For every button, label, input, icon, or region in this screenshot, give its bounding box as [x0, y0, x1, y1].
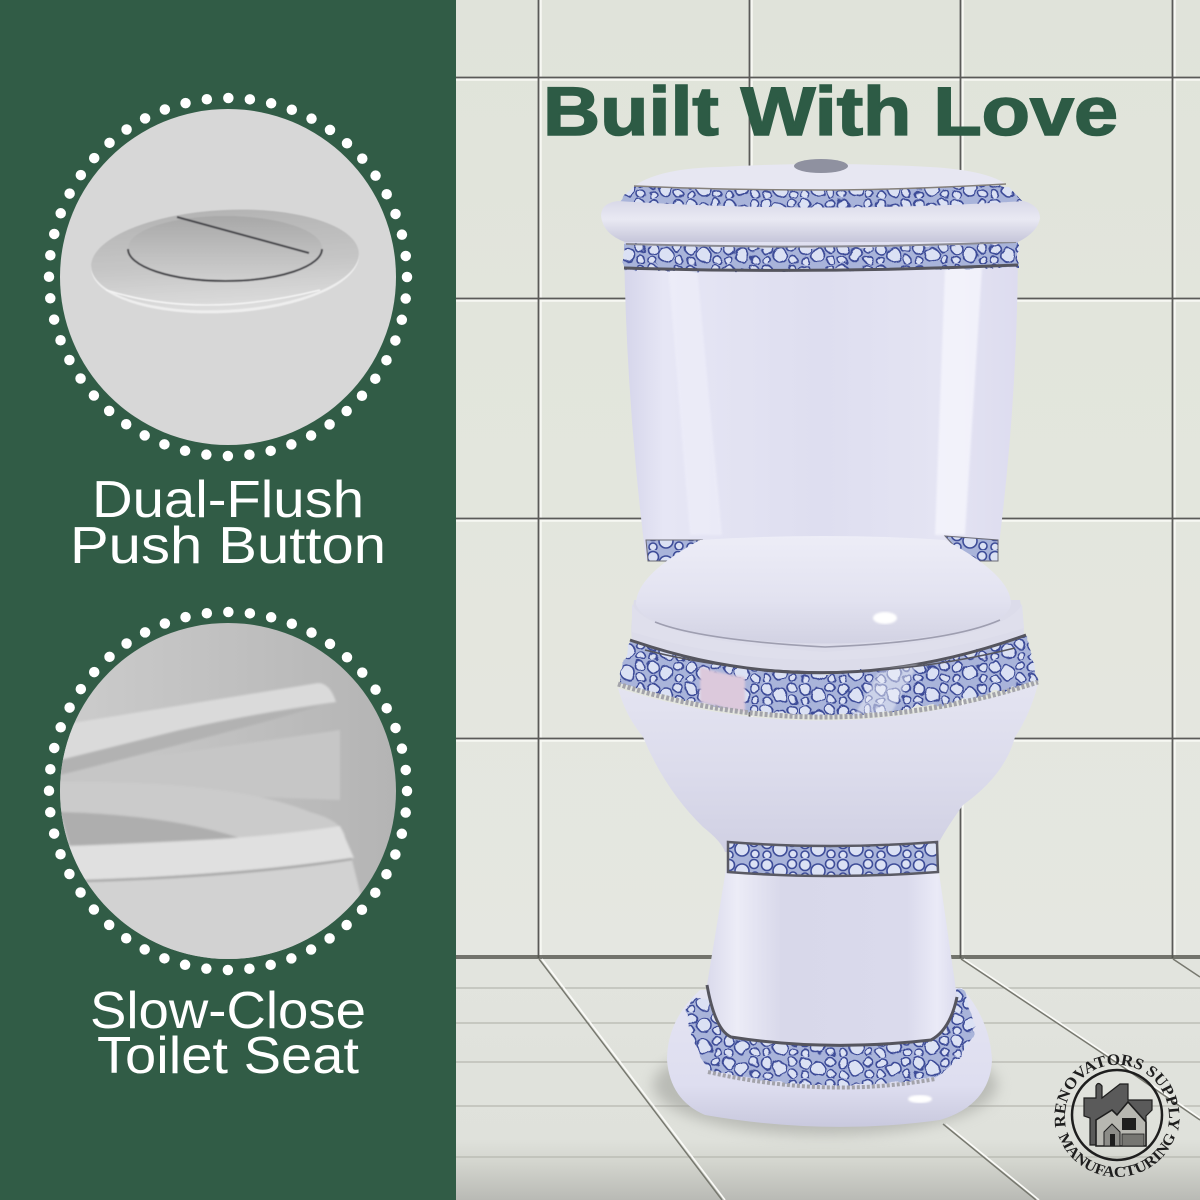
logo: Renovators Supply Manufacturing — [1054, 1054, 1180, 1178]
feature: slow-close toilet seat — [49, 612, 407, 1085]
base — [667, 988, 992, 1127]
bowl — [618, 684, 1038, 852]
dotted ring — [49, 98, 407, 456]
seat underside rim — [631, 600, 1024, 672]
feature: dual-flush push button — [49, 98, 407, 575]
rim decorative band — [618, 635, 1038, 717]
label: dual-flush push button: Dual-Flush — [92, 471, 364, 529]
flush button — [794, 159, 848, 173]
house icon — [1084, 1084, 1152, 1146]
label: slow-close toilet seat: Slow-Close — [90, 982, 366, 1040]
base band — [686, 990, 976, 1086]
toilet illustration — [601, 159, 1040, 1127]
panel: green sidebar — [44, 92, 412, 1074]
tank decorative band — [624, 242, 1018, 271]
pedestal — [707, 842, 957, 1045]
tank lid — [601, 159, 1040, 242]
pedestal band — [728, 842, 938, 876]
label: dual-flush push button — [70, 471, 386, 575]
label: dual-flush push button: Push Button — [70, 517, 386, 575]
floor shadow — [653, 1035, 997, 1135]
photo: push button — [60, 109, 396, 445]
logo: Renovators Supply Manufacturing: MANUFACTURING — [1058, 1132, 1175, 1178]
dotted ring — [49, 612, 407, 970]
logo: Renovators Supply Manufacturing: RENOVATORS SUPPLY — [1054, 1054, 1180, 1131]
title: Built With Love — [543, 73, 1118, 150]
photo: seat detail — [60, 623, 396, 960]
toilet seat — [632, 536, 1024, 672]
tank — [624, 242, 1018, 561]
label: slow-close toilet seat — [90, 982, 366, 1085]
label: slow-close toilet seat: Toilet Seat — [97, 1027, 360, 1085]
photo: tiled bathroom background — [456, 0, 1200, 1200]
